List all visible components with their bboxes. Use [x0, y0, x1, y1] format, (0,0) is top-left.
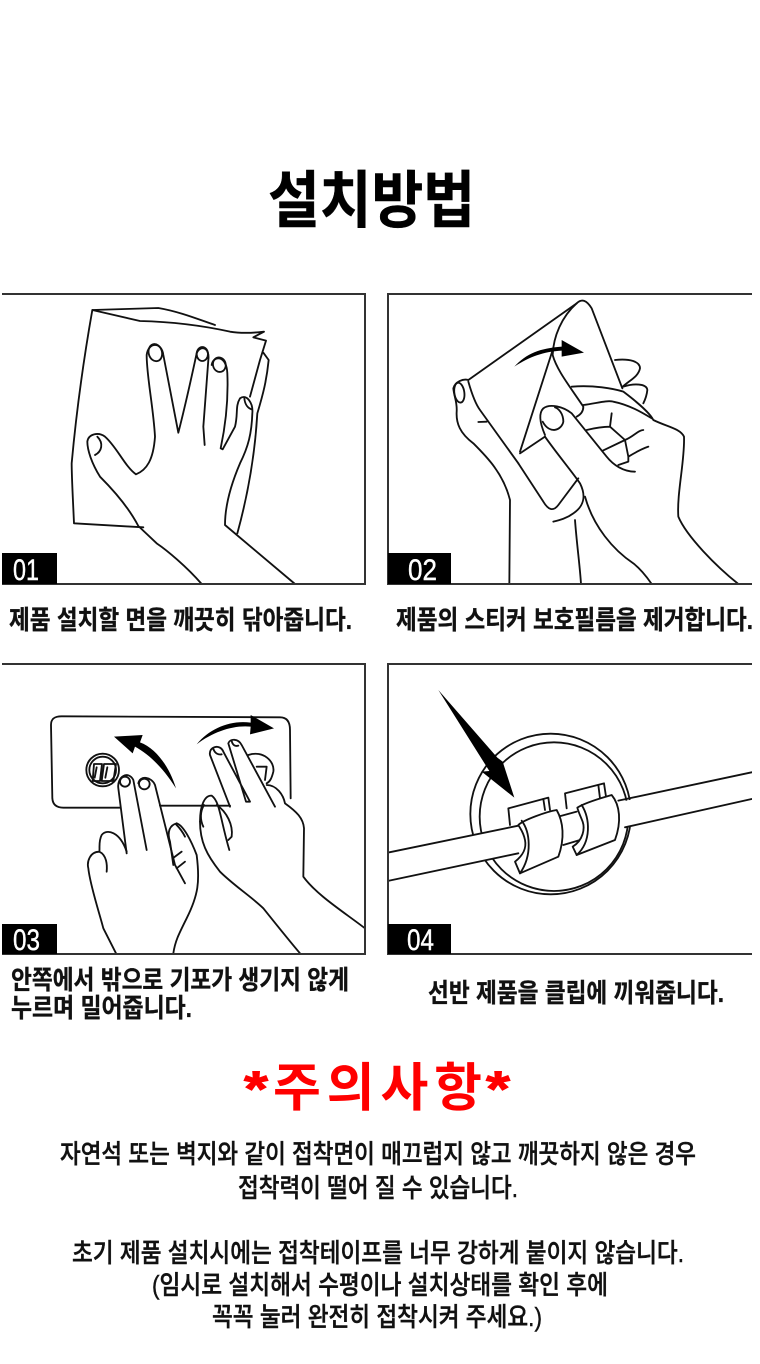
arrow [438, 690, 514, 798]
text block: caution 2 [72, 1238, 684, 1332]
caption [11, 965, 349, 1023]
number badge 04 [388, 924, 451, 957]
number badge 03: 03 [13, 924, 40, 957]
heading: cautions: * [244, 1061, 269, 1117]
caption: 누르며 밀어줍니다. [11, 993, 192, 1023]
text block: caution 2: 초기 제품 설치시에는 접착테이프를 너무 강하게 붙이지 않습니다. [72, 1238, 684, 1268]
text block: caution 2: (임시로 설치해서 수평이나 설치상태를 확인 후에 [152, 1270, 608, 1300]
text block: caution 1: 접착력이 떨어 질 수 있습니다. [238, 1173, 518, 1203]
caption: 선반 제품을 클립에 끼워줍니다. [428, 978, 724, 1008]
illustration: pressing plate with two hands [51, 715, 365, 953]
number badge 01 [2, 553, 57, 587]
caption: 제품 설치할 면을 깨끗히 닦아줍니다. [9, 605, 352, 635]
arrow [514, 340, 584, 367]
illustration: peeling sticker film [453, 301, 738, 584]
number badge 03 [2, 924, 57, 957]
panel frame [388, 664, 752, 954]
heading: cautions: * [486, 1061, 511, 1117]
text block: caution 1 [60, 1139, 696, 1203]
number badge 02 [388, 553, 451, 587]
panel: step 01 [2, 294, 365, 635]
text block: caution 2: 꼭꼭 눌러 완전히 접착시켜 주세요.) [212, 1302, 542, 1332]
panel frame [2, 294, 365, 584]
panel: step 04 [388, 664, 752, 1008]
number badge 01: 01 [13, 554, 39, 587]
illustration: shelf clipped onto rod [389, 690, 752, 894]
illustration: hand wiping with cloth [72, 308, 295, 584]
panel frame [2, 664, 365, 954]
panel frame [388, 294, 752, 584]
caption: 안쪽에서 밖으로 기포가 생기지 않게 [11, 965, 349, 995]
title: 설치방법 [268, 167, 475, 236]
panel: step 02 [388, 294, 753, 635]
number badge 02: 02 [408, 554, 437, 587]
heading: cautions: 주의사항 [273, 1060, 482, 1118]
panel: step 03 [2, 664, 365, 1023]
number badge 04: 04 [407, 924, 434, 957]
